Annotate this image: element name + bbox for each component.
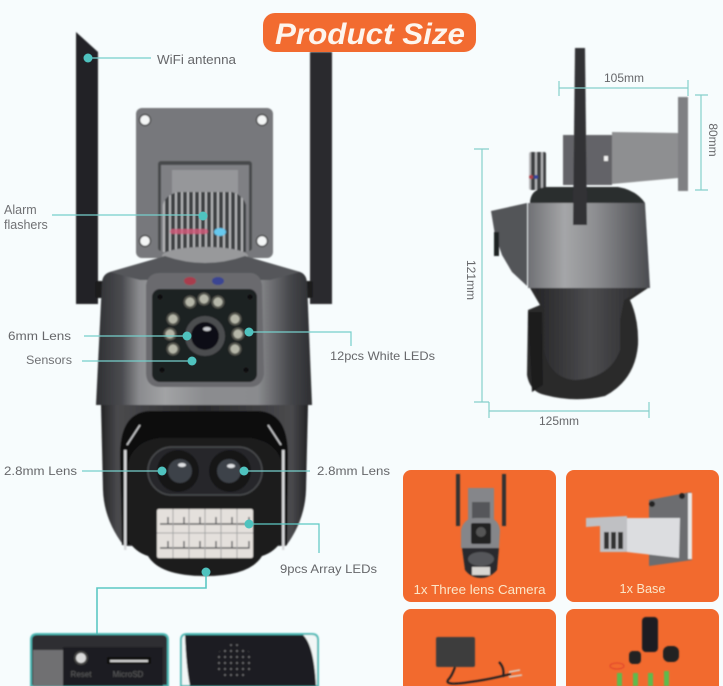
inset: reset and microSD: Reset bbox=[71, 670, 92, 679]
callout: 2.8mm Lens right bbox=[240, 464, 390, 478]
camera front view bbox=[76, 32, 332, 576]
callout: Alarm flashers: flashers bbox=[4, 218, 48, 232]
callout: 6mm Lens: 6mm Lens bbox=[8, 329, 71, 343]
side body bbox=[491, 187, 650, 288]
dimension: 125mm: 125mm bbox=[539, 414, 579, 428]
2.8mm lens right bbox=[209, 450, 251, 492]
dimension: 105mm bbox=[559, 71, 688, 96]
callout: 9pcs Array LEDs: 9pcs Array LEDs bbox=[280, 562, 377, 576]
callout lines and labels bbox=[4, 53, 435, 634]
array LED panel bbox=[157, 509, 253, 558]
dimension: 80mm: 80mm bbox=[706, 123, 720, 157]
side lower ball bbox=[527, 288, 648, 399]
callout: 6mm Lens bbox=[8, 329, 192, 343]
dimension: 121mm bbox=[464, 149, 489, 402]
lower body bbox=[101, 405, 308, 550]
callout: WiFi antenna: WiFi antenna bbox=[157, 53, 236, 67]
card: power adapter bbox=[403, 609, 556, 686]
mini camera illustration bbox=[456, 474, 506, 578]
card: accessories bbox=[566, 609, 719, 686]
callout: 12pcs White LEDs: 12pcs White LEDs bbox=[330, 349, 435, 363]
white LEDs bbox=[164, 294, 244, 354]
upper body bbox=[96, 256, 312, 405]
power adapter illustration bbox=[436, 637, 522, 684]
wall mount plate bbox=[136, 108, 273, 258]
camera side view bbox=[491, 48, 688, 399]
side alarm flasher bbox=[529, 152, 546, 190]
callout: 2.8mm Lens left: 2.8mm Lens bbox=[4, 464, 77, 478]
callout: 12pcs White LEDs bbox=[244, 328, 435, 363]
red and blue indicators bbox=[184, 277, 224, 285]
accessories illustration bbox=[610, 617, 679, 686]
title badge: Product Size bbox=[275, 18, 465, 51]
6mm lens bbox=[185, 316, 225, 356]
lens module bbox=[128, 438, 282, 576]
2.8mm lens left bbox=[157, 450, 199, 492]
callout: 2.8mm Lens left bbox=[4, 464, 166, 478]
callout: Sensors: Sensors bbox=[26, 353, 72, 367]
left wifi antenna bbox=[76, 32, 105, 304]
side bracket bbox=[563, 97, 688, 191]
callout: Alarm flashers bbox=[4, 203, 208, 232]
card: camera bbox=[403, 470, 556, 602]
dimension: 121mm: 121mm bbox=[464, 260, 478, 300]
right wifi antenna bbox=[303, 52, 332, 304]
card: base: 1x Base bbox=[620, 582, 666, 596]
side antenna bbox=[573, 48, 587, 225]
callout: Alarm flashers: Alarm bbox=[4, 203, 37, 217]
dimension: 105mm: 105mm bbox=[604, 71, 644, 85]
inset: reset and microSD bbox=[31, 634, 168, 686]
dimension: 125mm bbox=[489, 402, 649, 428]
callout: 2.8mm Lens right: 2.8mm Lens bbox=[317, 464, 390, 478]
callout: Sensors bbox=[26, 353, 196, 367]
dimension: 80mm bbox=[695, 95, 720, 190]
card: camera: 1x Three lens Camera bbox=[414, 583, 546, 597]
inset: speaker bbox=[181, 634, 318, 686]
callout: WiFi antenna bbox=[84, 53, 236, 67]
callout: 9pcs Array LEDs bbox=[244, 520, 377, 576]
base bracket illustration bbox=[586, 492, 692, 566]
inset: reset and microSD: MicroSD bbox=[113, 670, 144, 679]
front lens panel bbox=[152, 289, 257, 382]
callout: connector to inset panels bbox=[97, 568, 210, 634]
card: base bbox=[566, 470, 719, 602]
alarm flasher cylinder bbox=[162, 192, 248, 265]
